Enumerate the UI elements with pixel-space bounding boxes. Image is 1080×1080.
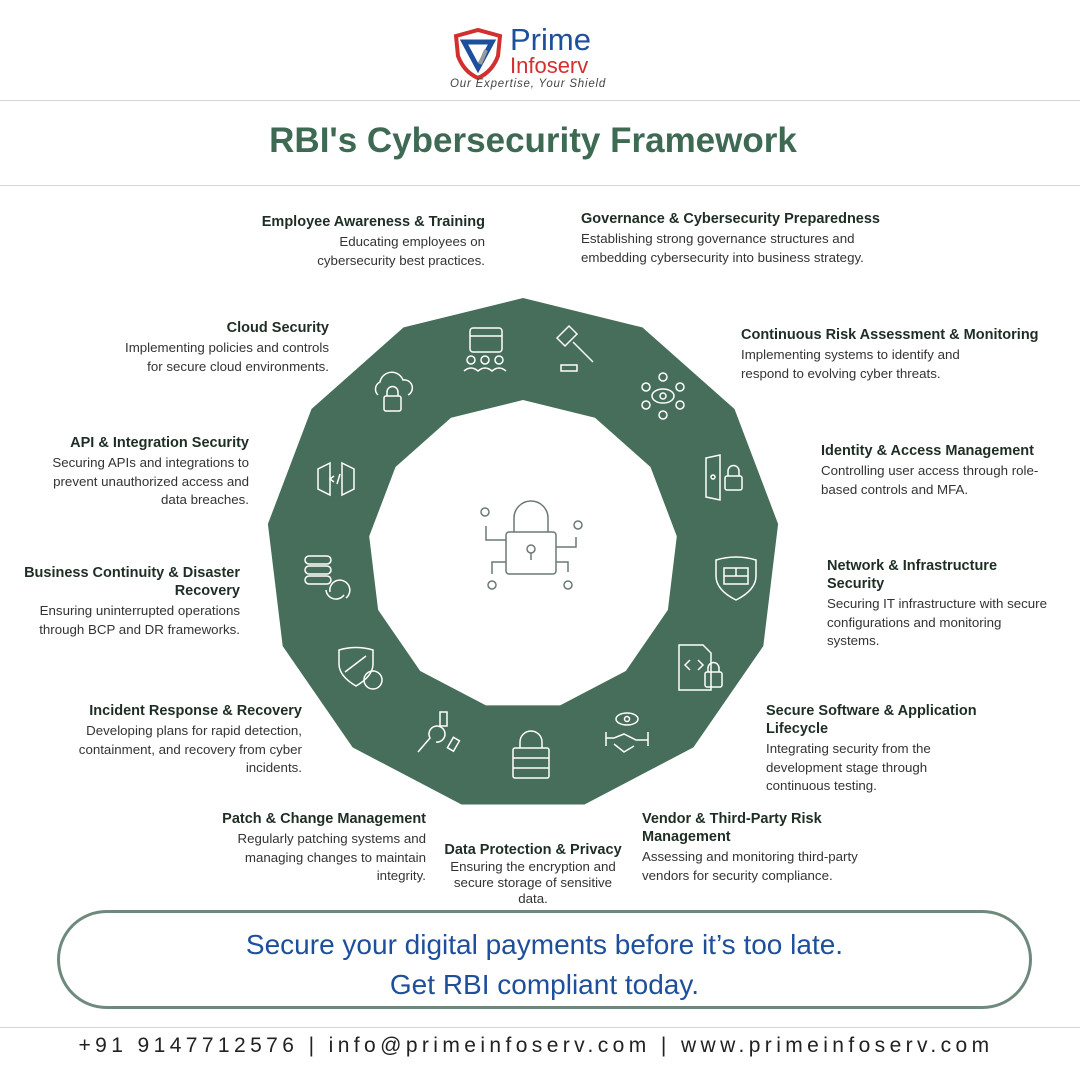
- text: network security: Securing IT infrastructure with secure: [827, 596, 1047, 611]
- text: data protection: secure storage of sensitive: [454, 875, 612, 890]
- text: patch management: Regularly patching systems and: [238, 831, 426, 846]
- icon: secure software: [679, 645, 722, 690]
- text: governance: embedding cybersecurity into business strategy.: [581, 250, 864, 264]
- text: identity access: Controlling user access through role-: [821, 463, 1038, 478]
- text: vendor risk: [642, 811, 858, 882]
- text: vendor risk: vendors for security compliance.: [642, 868, 833, 882]
- text: governance: Establishing strong governance structures and: [581, 231, 854, 246]
- text: identity access: Identity & Access Management: [821, 443, 1034, 459]
- icon: cloud lock: [376, 372, 412, 411]
- text: API security: data breaches.: [161, 492, 249, 507]
- text: patch management: managing changes to maintain: [245, 850, 426, 864]
- icon: data protection: [513, 731, 549, 778]
- text: patch management: [222, 811, 426, 883]
- text: continuous risk: Implementing systems to identify and: [741, 347, 960, 362]
- text: continuous risk: Continuous Risk Assessment & Monitoring: [741, 327, 1039, 343]
- text: secure software: Secure Software & Application Lifecycle: [766, 703, 977, 737]
- icon: vendor handshake: [606, 713, 648, 752]
- text: API security: [52, 435, 249, 507]
- text: cloud security: Cloud Security: [227, 320, 329, 336]
- text: business continuity: [24, 565, 240, 636]
- text: business continuity: Ensuring uninterrupted operations: [40, 603, 240, 618]
- icon: central lock circuit: [481, 501, 582, 589]
- text: continuous risk: respond to evolving cyber threats.: [741, 366, 941, 380]
- text: incident response: incidents.: [246, 760, 302, 775]
- text: business continuity: through BCP and DR frameworks.: [39, 622, 240, 636]
- icon: employee training: [464, 328, 506, 371]
- text: network security: systems.: [827, 633, 879, 648]
- text: API security: prevent unauthorized access and: [53, 474, 249, 488]
- text: patch management: integrity.: [377, 868, 426, 883]
- text: incident response: containment, and recovery from cyber: [79, 742, 302, 756]
- text: network security: Network & Infrastructure Security: [827, 558, 997, 592]
- icon: patch tools: [418, 712, 459, 752]
- text: employee awareness: cybersecurity best practices.: [317, 252, 485, 268]
- logo: Prime: [510, 22, 591, 57]
- callout: CTA: Secure your digital payments before it’s too late.: [246, 929, 843, 960]
- text: identity access: based controls and MFA.: [821, 482, 968, 496]
- text: incident response: Developing plans for rapid detection,: [86, 723, 302, 738]
- logo: [450, 22, 606, 90]
- text: employee awareness: [262, 214, 485, 268]
- text: continuous risk: [741, 327, 1039, 380]
- logo: Our Expertise, Your Shield: [450, 78, 606, 90]
- icon: API: [318, 463, 354, 495]
- icon: gavel: [557, 326, 593, 371]
- text: API security: Securing APIs and integrations to: [52, 455, 249, 470]
- text: API security: API & Integration Security: [70, 435, 249, 451]
- text: employee awareness: Educating employees on: [339, 234, 485, 249]
- text: data protection: Ensuring the encryption and: [450, 859, 616, 874]
- text: vendor risk: Vendor & Third-Party Risk Management: [642, 811, 822, 845]
- text: business continuity: Business Continuity & Disaster Recovery: [24, 565, 240, 599]
- icon: firewall shield: [716, 557, 756, 600]
- text: cloud security: [125, 320, 329, 374]
- text: secure software: continuous testing.: [766, 778, 877, 793]
- text: cloud security: Implementing policies and controls: [125, 340, 329, 355]
- icon: BCDR servers: [305, 556, 350, 599]
- text: network security: configurations and monitoring: [827, 614, 1001, 630]
- callout: CTA: [57, 910, 1032, 1009]
- text: incident response: Incident Response & Recovery: [89, 703, 302, 719]
- callout: CTA: Get RBI compliant today.: [390, 969, 699, 1000]
- text: governance: [581, 211, 880, 264]
- logo: Infoserv: [510, 53, 588, 78]
- icon: identity door lock: [706, 455, 742, 500]
- footer contact: +91 9147712576 | info@primeinfoserv.com | www.primeinfoserv.com: [78, 1034, 994, 1057]
- icon: incident shield: [339, 648, 382, 689]
- text: identity access: [821, 443, 1038, 496]
- title: RBI's Cybersecurity Framework: [269, 121, 797, 160]
- text: secure software: development stage through: [766, 760, 927, 774]
- text: patch management: Patch & Change Management: [222, 811, 426, 827]
- text: data protection: [444, 842, 622, 906]
- text: network security: [827, 558, 1047, 648]
- text: employee awareness: Employee Awareness & Training: [262, 214, 485, 230]
- text: vendor risk: Assessing and monitoring third-party: [642, 849, 858, 864]
- icon: shield logo: [454, 28, 502, 80]
- text: governance: Governance & Cybersecurity Preparedness: [581, 211, 880, 227]
- text: incident response: [79, 703, 302, 775]
- text: cloud security: for secure cloud environments.: [147, 358, 329, 374]
- icon: risk monitoring: [642, 373, 684, 419]
- text: data protection: Data Protection & Privacy: [444, 842, 622, 858]
- text: secure software: [766, 703, 977, 793]
- text: secure software: Integrating security from the: [766, 741, 931, 756]
- text: data protection: data.: [518, 891, 548, 906]
